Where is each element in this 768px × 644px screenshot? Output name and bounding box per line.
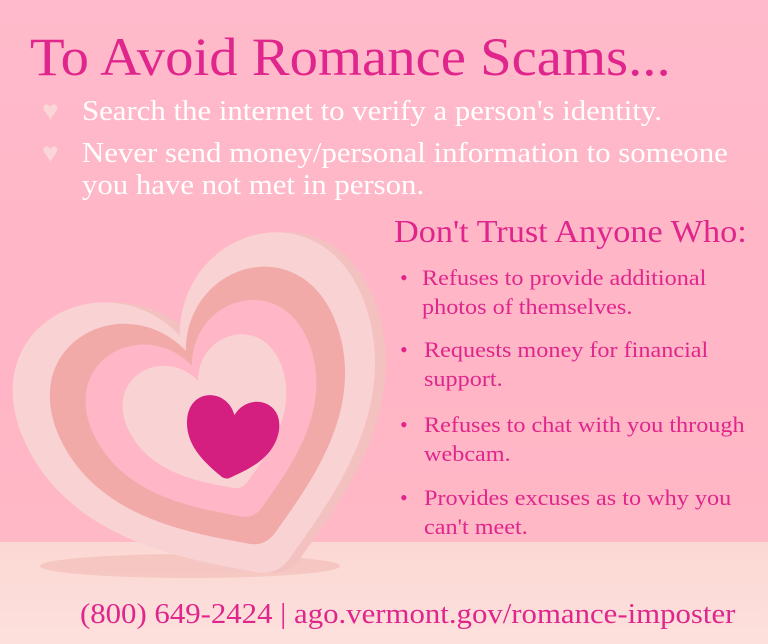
tip 2 bbox=[42, 138, 728, 201]
bullet list: top tips: Never send money/personal information to someone bbox=[82, 138, 728, 169]
list: warning signs: webcam. bbox=[424, 441, 511, 466]
title: To Avoid Romance Scams... bbox=[30, 27, 671, 87]
bullet list: top tips: you have not met in person. bbox=[82, 170, 424, 201]
list: warning signs: support. bbox=[424, 366, 503, 391]
list: warning signs: can't meet. bbox=[424, 514, 528, 539]
bullet list: top tips bbox=[42, 96, 728, 201]
item 3: • bbox=[400, 412, 408, 437]
item 3 bbox=[400, 412, 745, 466]
item 1 bbox=[400, 265, 706, 319]
item 4: • bbox=[400, 485, 408, 510]
item 2: • bbox=[400, 337, 408, 362]
list: warning signs: Requests money for financial bbox=[424, 337, 708, 362]
item 2 bbox=[400, 337, 708, 391]
item 1: • bbox=[400, 265, 408, 290]
list: warning signs: Refuses to provide additional bbox=[422, 265, 706, 290]
list: warning signs: photos of themselves. bbox=[422, 294, 632, 319]
heading: don't trust: Don't Trust Anyone Who: bbox=[394, 213, 747, 249]
bullet list: top tips: Search the internet to verify a person's identity. bbox=[82, 96, 662, 127]
tip 1: ♥ bbox=[42, 96, 59, 127]
list: warning signs: Provides excuses as to why you bbox=[424, 485, 731, 510]
list: warning signs: Refuses to chat with you through bbox=[424, 412, 745, 437]
tip 2: ♥ bbox=[42, 138, 59, 169]
item 4 bbox=[400, 485, 731, 539]
footer contact: (800) 649-2424 | ago.vermont.gov/romance-imposter bbox=[80, 599, 735, 630]
tip 1 bbox=[42, 96, 662, 127]
list: warning signs bbox=[400, 265, 745, 539]
icon: magenta heart bbox=[180, 392, 283, 485]
